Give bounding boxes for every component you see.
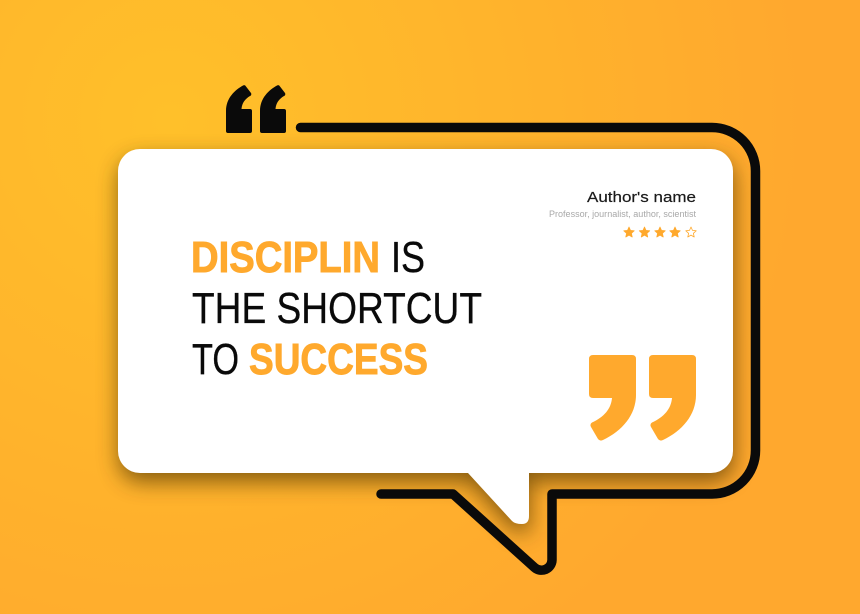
headline: SUCCESS: [249, 335, 428, 384]
author role: Professor, journalist, author, scientist: [549, 209, 696, 219]
icon: closing quotation mark: [589, 355, 696, 441]
icon: opening quotation mark: [226, 85, 286, 133]
headline: TO: [192, 335, 239, 384]
white speech bubble: [118, 149, 733, 524]
headline: DISCIPLIN: [191, 233, 380, 282]
star rating: [624, 227, 696, 237]
headline: [191, 233, 482, 384]
author name: Author's name: [587, 189, 696, 206]
headline: THE SHORTCUT: [192, 284, 482, 333]
headline: IS: [391, 233, 425, 282]
outline speech bubble: [300, 128, 756, 570]
bubble shadow: [119, 158, 734, 533]
